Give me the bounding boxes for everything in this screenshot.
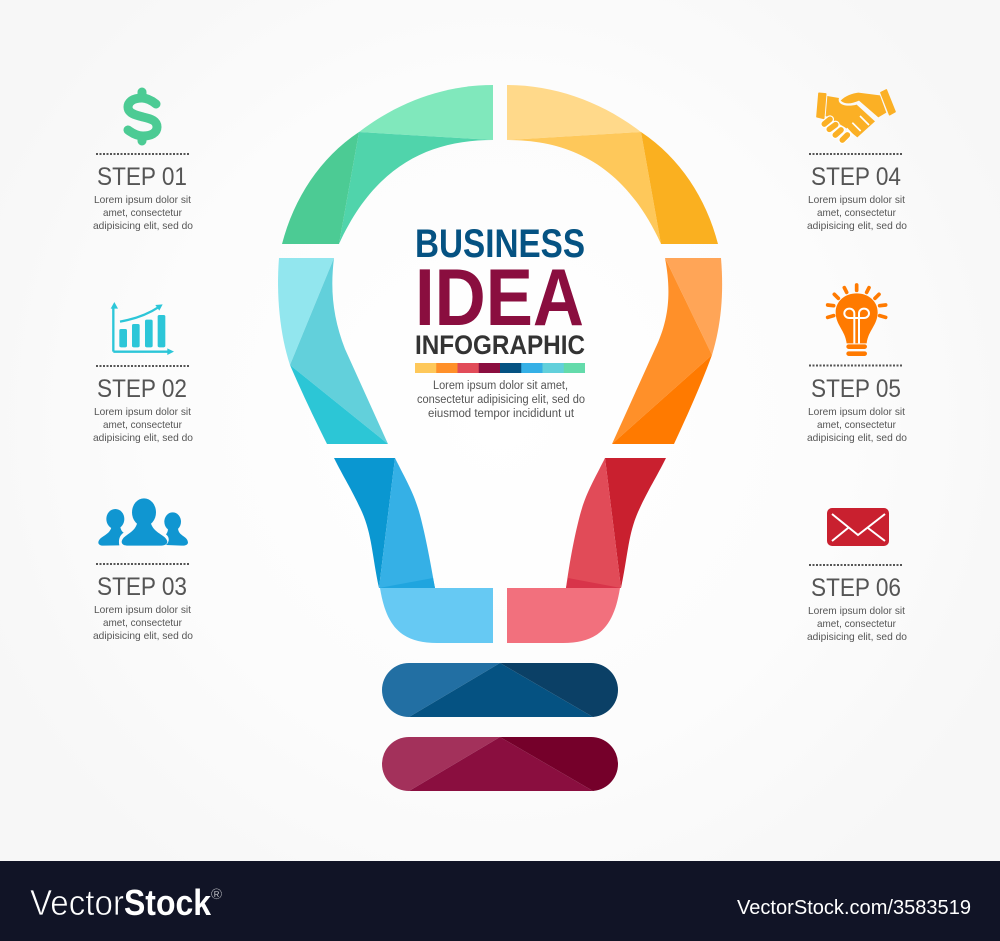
step text: Lorem ipsum dolor sit: [808, 194, 905, 206]
step text: adipisicing elit, sed do: [93, 432, 193, 444]
segment: light blue base left: [380, 588, 493, 643]
heading: idea: IDEA: [415, 253, 584, 343]
icon: envelope: [827, 508, 889, 546]
step title: STEP 01: [97, 163, 187, 191]
footer logo: Stock: [124, 882, 212, 923]
step text: adipisicing elit, sed do: [807, 220, 907, 232]
divider: [809, 364, 903, 366]
step text: Lorem ipsum dolor sit: [808, 605, 905, 617]
lightbulb diagram: [278, 85, 722, 791]
step text: Lorem ipsum dolor sit: [94, 604, 191, 616]
step title: STEP 02: [97, 375, 187, 403]
step 01: [93, 92, 193, 232]
icon: dollar: [128, 92, 157, 141]
segment: green bulb top left: [282, 85, 493, 244]
maroon screw cap pill: [382, 737, 618, 791]
divider: [809, 153, 903, 155]
step text: [807, 194, 907, 232]
icon: people: [98, 498, 188, 546]
step text: amet, consectetur: [817, 618, 896, 630]
step 04: [807, 90, 907, 232]
step title: STEP 05: [811, 375, 901, 403]
center description: consectetur adipisicing elit, sed do: [417, 394, 585, 406]
step text: [93, 604, 193, 642]
step text: Lorem ipsum dolor sit: [808, 406, 905, 418]
step text: adipisicing elit, sed do: [93, 630, 193, 642]
blue screw cap pill: [382, 663, 618, 717]
step 02: [93, 302, 193, 444]
step text: amet, consectetur: [103, 419, 182, 431]
divider: [96, 153, 190, 155]
divider: [96, 563, 190, 565]
segment: red neck right: [566, 458, 666, 588]
footer logo: [30, 882, 222, 923]
step text: amet, consectetur: [103, 617, 182, 629]
heading: infographic: INFOGRAPHIC: [415, 330, 585, 360]
segment: yellow bulb top right: [507, 85, 718, 244]
step text: [93, 406, 193, 444]
footer logo: ®: [211, 886, 222, 903]
color strip: [415, 363, 585, 373]
step text: amet, consectetur: [817, 207, 896, 219]
footer logo: Vector: [30, 882, 124, 923]
step text: amet, consectetur: [103, 207, 182, 219]
step text: Lorem ipsum dolor sit: [94, 406, 191, 418]
center description: [417, 380, 585, 420]
step title: STEP 03: [97, 573, 187, 601]
step 03: [93, 498, 193, 642]
segment: pink base right: [507, 588, 620, 643]
segment: blue neck left: [334, 458, 435, 588]
step text: amet, consectetur: [817, 419, 896, 431]
step text: adipisicing elit, sed do: [807, 631, 907, 643]
footer bar: [0, 861, 1000, 941]
step text: [93, 194, 193, 232]
step text: adipisicing elit, sed do: [807, 432, 907, 444]
heading: business: BUSINESS: [415, 222, 585, 266]
icon: lightbulb: [828, 285, 886, 354]
step text: Lorem ipsum dolor sit: [94, 194, 191, 206]
step title: STEP 06: [811, 574, 901, 602]
center description: Lorem ipsum dolor sit amet,: [433, 380, 568, 392]
step text: [807, 605, 907, 643]
step text: [807, 406, 907, 444]
segment: orange bulb right: [612, 258, 722, 444]
step 06: [807, 508, 907, 643]
icon: handshake: [817, 90, 895, 140]
footer image id: VectorStock.com/3583519: [737, 897, 971, 919]
divider: [96, 365, 190, 367]
step title: STEP 04: [811, 163, 901, 191]
icon: bar chart: [111, 302, 174, 355]
center title block: [415, 222, 585, 420]
segment: teal bulb left: [278, 258, 388, 444]
step text: adipisicing elit, sed do: [93, 220, 193, 232]
divider: [809, 564, 903, 566]
step 05: [807, 285, 907, 444]
center description: eiusmod tempor incididunt ut: [428, 408, 575, 420]
